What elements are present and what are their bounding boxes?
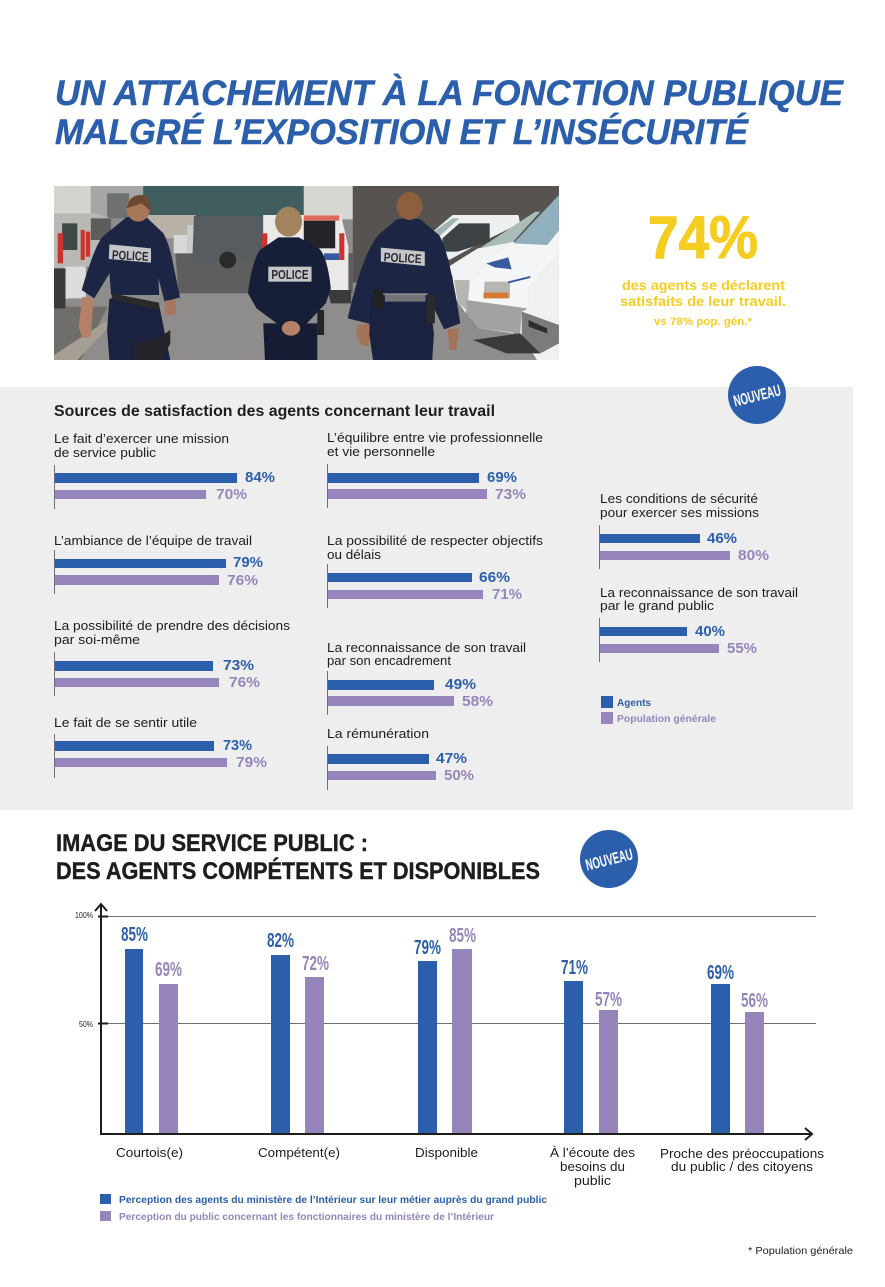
label: de service public	[54, 445, 157, 460]
officer centre: POLICE	[271, 267, 309, 282]
photo: three police officers walking	[54, 186, 559, 360]
agents bar 40%: 40%	[695, 623, 725, 640]
agents bar 69%	[328, 469, 517, 486]
item: objectifs ou délais	[327, 533, 544, 608]
axes with arrows	[95, 904, 812, 1140]
label: par soi-même	[54, 632, 140, 647]
category labels: Proche des préoccupations	[660, 1146, 825, 1161]
title	[55, 74, 845, 152]
label: La possibilité de prendre des décisions	[54, 618, 291, 633]
label: et vie personnelle	[327, 444, 435, 459]
badge: nouveau	[728, 366, 786, 424]
item: reconnaissance encadrement	[327, 640, 526, 715]
item: ambiance de l'équipe	[54, 533, 263, 594]
population bar 70%	[55, 486, 247, 503]
officer right	[348, 192, 460, 360]
key figure: 74% satisfied	[620, 204, 786, 328]
group: à l'écoute: 71%	[561, 957, 588, 979]
agents bar 79%: 79%	[233, 554, 263, 571]
label	[54, 431, 229, 460]
label: La possibilité de respecter objectifs	[327, 533, 544, 548]
bar chart: image du service public	[75, 904, 825, 1188]
group: disponible: 85%	[449, 925, 476, 947]
item: prendre des décisions	[54, 618, 291, 696]
population bar 58%: 58%	[462, 693, 493, 710]
group: proche des préoccupations: 69%	[707, 962, 734, 984]
label: La reconnaissance de son travail	[327, 640, 526, 655]
title: MALGRÉ L’EXPOSITION ET L’INSÉCURITÉ	[55, 113, 750, 152]
item: mission de service public	[54, 431, 275, 509]
section heading: image du service public	[56, 830, 540, 885]
group: disponible	[414, 925, 476, 1134]
group: disponible: 79%	[414, 937, 441, 959]
key figure: 74% satisfied: vs 78% pop. gén.*	[654, 316, 753, 328]
axis labels: 50%	[79, 1019, 93, 1029]
group: compétent	[267, 930, 329, 1134]
officer left: POLICE	[112, 247, 149, 264]
population bar 79%	[55, 754, 267, 771]
badge: nouveau: NOUVEAU	[584, 846, 635, 875]
label	[327, 430, 543, 459]
legend: agents / population: Population générale	[617, 714, 716, 725]
officer right: POLICE	[383, 249, 422, 266]
label: Les conditions de sécurité	[600, 491, 758, 506]
agents bar 40%	[600, 623, 725, 640]
group: proche des préoccupations: 56%	[741, 990, 768, 1012]
officer centre	[248, 207, 331, 360]
population bar 70%: 70%	[216, 486, 247, 503]
population bar 76%	[55, 572, 258, 589]
category labels: du public / des citoyens	[671, 1159, 814, 1174]
label	[327, 533, 544, 562]
title: UN ATTACHEMENT À LA FONCTION PUBLIQUE	[55, 74, 845, 113]
agents bar 47%	[328, 750, 467, 767]
group: courtois: 85%	[121, 924, 148, 946]
legend: perception: Perception des agents du ministère de l’Intérieur sur leur métier auprès du grand public	[119, 1195, 547, 1206]
label: par le grand public	[600, 598, 715, 613]
population bar 55%: 55%	[727, 640, 757, 657]
category labels: À l’écoute des	[550, 1145, 636, 1160]
label: La reconnaissance de son travail	[600, 585, 798, 600]
label	[327, 640, 526, 668]
axis labels	[75, 910, 93, 1029]
population bar 80%: 80%	[738, 547, 769, 564]
category labels: besoins du	[560, 1159, 625, 1174]
label	[54, 618, 291, 647]
population bar 73%: 73%	[495, 486, 526, 503]
agents bar 73%	[55, 737, 252, 754]
population bar 71%: 71%	[492, 586, 522, 603]
label: par son encadrement	[327, 653, 451, 668]
agents bar 66%	[328, 569, 510, 586]
section heading: image du service public: DES AGENTS COMPÉTENTS ET DISPONIBLES	[56, 857, 540, 885]
item: reconnaissance grand public	[600, 585, 798, 662]
key figure: 74% satisfied: 74%	[648, 204, 758, 271]
footnote: * Population générale	[748, 1245, 853, 1257]
agents bar 84%: 84%	[245, 469, 275, 486]
population bar 55%	[600, 640, 757, 657]
label: L’ambiance de l’équipe de travail	[54, 533, 252, 548]
label: ou délais	[327, 547, 382, 562]
item: équilibre vie pro / perso	[327, 430, 543, 508]
agents bar 66%: 66%	[479, 569, 510, 586]
population bar 79%: 79%	[236, 754, 267, 771]
population bar 71%	[328, 586, 522, 603]
label: L’équilibre entre vie professionnelle	[327, 430, 543, 445]
legend: agents / population: Agents	[617, 698, 651, 709]
legend: perception	[100, 1194, 547, 1223]
legend: perception: Perception du public concernant les fonctionnaires du ministère de l’Intérieur	[119, 1212, 494, 1223]
key figure: 74% satisfied: satisfaits de leur travail.	[620, 293, 786, 309]
group: à l'écoute	[561, 957, 622, 1134]
key figure: 74% satisfied: des agents se déclarent	[622, 277, 785, 293]
section heading: image du service public: IMAGE DU SERVICE PUBLIC :	[56, 830, 368, 857]
group: compétent: 72%	[302, 953, 329, 975]
group: courtois: 69%	[155, 959, 182, 981]
population bar 76%: 76%	[229, 674, 260, 691]
agents bar 84%	[55, 469, 275, 486]
category labels: Disponible	[415, 1145, 478, 1160]
item: se sentir utile	[54, 715, 267, 778]
population bar 76%	[55, 674, 260, 691]
category labels: Compétent(e)	[258, 1145, 340, 1160]
group: proche des préoccupations	[707, 962, 768, 1134]
agents bar 79%	[55, 554, 263, 571]
category labels	[116, 1145, 825, 1188]
badge: nouveau	[580, 830, 638, 888]
agents bar 49%: 49%	[445, 676, 476, 693]
agents bar 49%	[328, 676, 476, 693]
population bar 50%	[328, 767, 474, 784]
legend: agents / population	[601, 696, 716, 725]
agents bar 47%: 47%	[436, 750, 467, 767]
label	[600, 491, 760, 520]
population bar 76%: 76%	[227, 572, 258, 589]
population bar 50%: 50%	[444, 767, 474, 784]
group: compétent: 82%	[267, 930, 294, 952]
item: conditions de sécurité	[600, 491, 769, 569]
agents bar 46%	[600, 530, 737, 547]
item: rémunération	[327, 726, 474, 790]
agents bar 73%	[55, 657, 254, 674]
agents bar 69%: 69%	[487, 469, 517, 486]
category labels: Courtois(e)	[116, 1145, 183, 1160]
badge: nouveau: NOUVEAU	[732, 382, 783, 411]
agents bar 73%: 73%	[223, 737, 252, 754]
agents bar 46%: 46%	[707, 530, 737, 547]
label: Le fait de se sentir utile	[54, 715, 197, 730]
group: à l'écoute: 57%	[595, 989, 622, 1011]
officer left	[79, 195, 180, 360]
label: La rémunération	[327, 726, 429, 741]
panel: sources of satisfaction	[0, 366, 853, 810]
category labels: public	[574, 1173, 612, 1188]
label	[600, 585, 798, 613]
panel heading: Sources de satisfaction des agents concernant leur travail	[54, 403, 495, 420]
label: Le fait d’exercer une mission	[54, 431, 229, 446]
group: courtois	[121, 924, 182, 1134]
agents bar 73%: 73%	[223, 657, 254, 674]
population bar 80%	[600, 547, 769, 564]
population bar 73%	[328, 486, 526, 503]
label: pour exercer ses missions	[600, 505, 760, 520]
axis labels: 100%	[75, 910, 93, 920]
population bar 58%	[328, 693, 493, 710]
